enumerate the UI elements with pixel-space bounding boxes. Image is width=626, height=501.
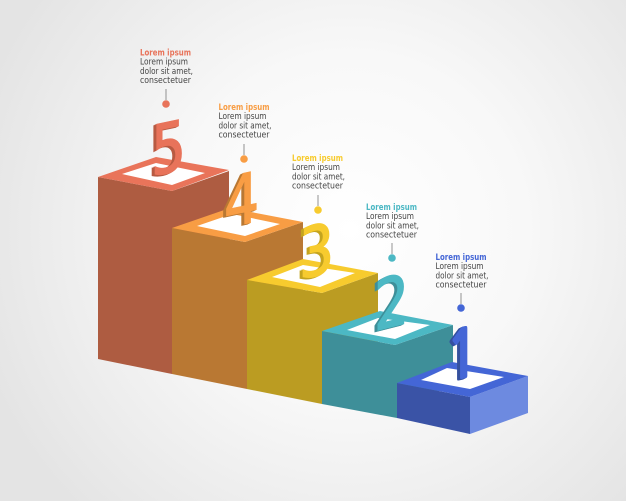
step 4 box [172,208,303,389]
callout 3: consectetuer [292,182,343,192]
number 3: 3 [296,208,331,297]
number 1: 1 [446,319,477,391]
callout 1: Lorem ipsum [436,262,484,272]
callout 1: dolor sit amet, [436,272,488,282]
callout 4: Lorem ipsum [218,103,270,113]
callout 3: Lorem ipsum [292,163,340,173]
number 2: 2 [374,258,409,347]
number 4: 4 [224,156,259,244]
number 4: 4 [223,156,258,245]
callout 4: dolor sit amet, [218,122,272,132]
callout 4: Lorem ipsum [218,112,266,122]
callout 4: consectetuer [218,130,270,140]
callout 5: Lorem ipsum [140,58,188,68]
callout 2: dolor sit amet, [366,222,419,232]
number 2: 2 [371,259,406,349]
number 5: 5 [149,105,184,193]
callout 3 [292,154,345,214]
number 5: 5 [150,104,185,193]
number 1: 1 [444,319,476,392]
number 4: 4 [221,157,256,246]
callout 5: Lorem ipsum [140,48,191,58]
callout 1: Lorem ipsum [436,253,486,263]
callout 1: consectetuer [436,280,487,290]
number 5: 5 [148,105,183,194]
number 1: 1 [444,320,475,392]
number 3: 3 [297,208,332,296]
step 3 box [247,259,378,404]
number 2: 2 [373,258,408,348]
number 2: 2 [372,259,407,348]
callout 2: Lorem ipsum [366,203,417,213]
callout 5 [140,48,193,108]
callout 2: consectetuer [366,230,417,240]
step 5 box [98,157,229,374]
number 3: 3 [299,207,334,295]
step 1 box [397,362,528,434]
number 5: 5 [151,104,186,192]
callout 2 [366,203,419,262]
callout 1 [436,253,488,312]
callout 5: dolor sit amet, [140,67,193,77]
number 1: 1 [446,318,478,391]
number 4: 4 [222,157,257,245]
number 3: 3 [298,207,333,296]
step 2 box [322,311,453,418]
callout 2: Lorem ipsum [366,212,414,222]
callout 3: Lorem ipsum [292,154,343,164]
callout 3: dolor sit amet, [292,172,345,182]
callout 5: consectetuer [140,76,191,86]
callout 4 [218,103,272,163]
